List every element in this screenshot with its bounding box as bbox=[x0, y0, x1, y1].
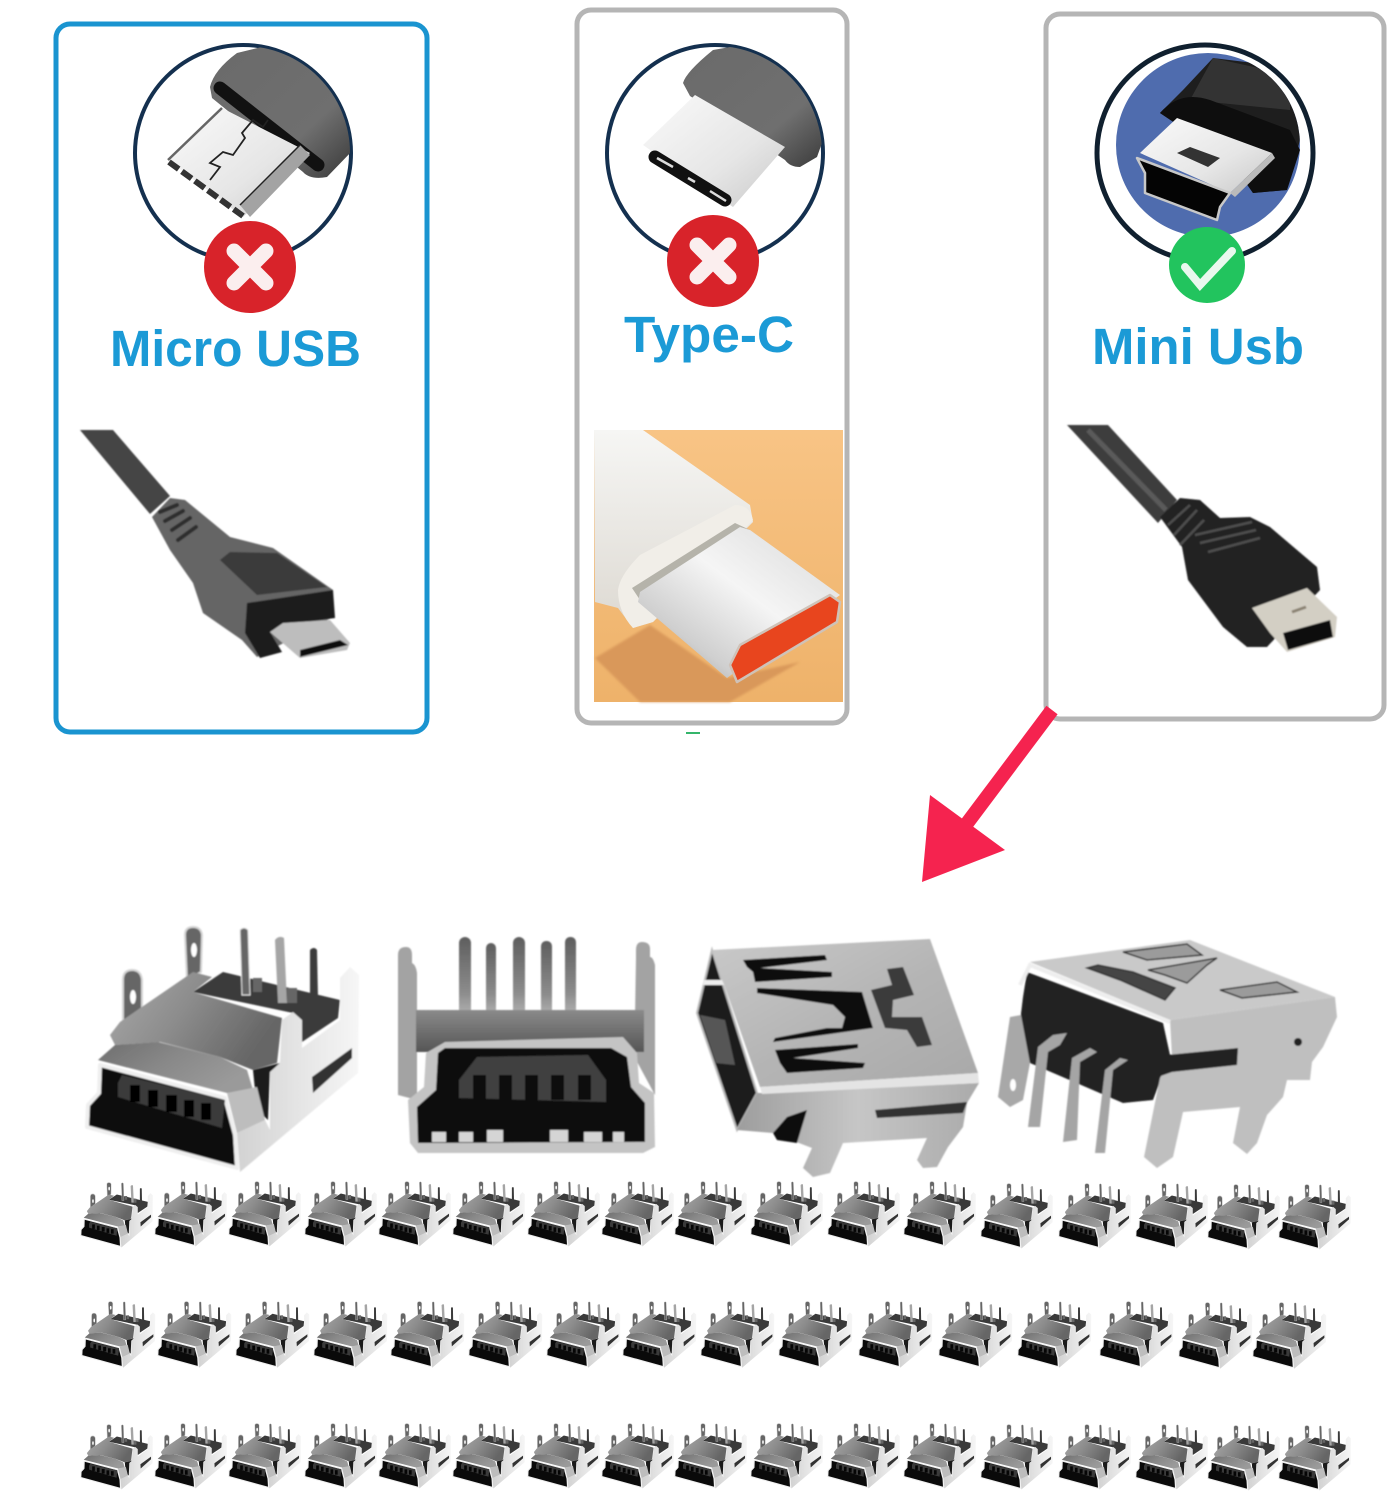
photo: Mini USB cable bbox=[1067, 425, 1337, 652]
rear pins bbox=[1028, 1033, 1128, 1153]
panel: Micro USB bbox=[56, 24, 427, 732]
label: Type-C: Type-C bbox=[624, 306, 794, 363]
icon: green check badge bbox=[1169, 227, 1245, 303]
label: Micro USB: Micro USB bbox=[110, 320, 361, 377]
label: Mini Usb: Mini Usb bbox=[1092, 318, 1304, 375]
small connectors: row 2 bbox=[82, 1302, 1326, 1369]
decorative green mark bbox=[686, 732, 700, 734]
top cut-outs bbox=[1087, 944, 1297, 1000]
connector: angled front view bbox=[87, 927, 359, 1172]
panel border bbox=[1046, 14, 1384, 719]
solder pins bbox=[459, 937, 576, 1017]
panel: Mini USB bbox=[1046, 14, 1384, 719]
panel border bbox=[577, 10, 847, 723]
photo: Type-C cable on orange bbox=[594, 430, 843, 702]
icon: Mini USB plug in circle bbox=[1097, 45, 1313, 261]
icon: red cross badge bbox=[667, 215, 759, 307]
icon: micro USB plug in circle bbox=[135, 40, 360, 261]
panel border bbox=[56, 24, 427, 732]
connector: straight front view bbox=[398, 937, 655, 1153]
connector: top view with cut-outs bbox=[697, 939, 979, 1177]
photo: micro USB cable bbox=[80, 430, 350, 658]
arrow: from Mini USB to sockets bbox=[922, 710, 1052, 882]
icon: Type-C plug in circle bbox=[607, 40, 835, 261]
connector: rear view with pins bbox=[998, 940, 1337, 1168]
small connectors: row 1 bbox=[81, 1182, 1351, 1249]
small connectors: row 3 bbox=[81, 1424, 1351, 1490]
panel: Type-C bbox=[577, 10, 847, 734]
icon: red cross badge bbox=[204, 221, 296, 313]
cut-outs bbox=[743, 955, 967, 1143]
